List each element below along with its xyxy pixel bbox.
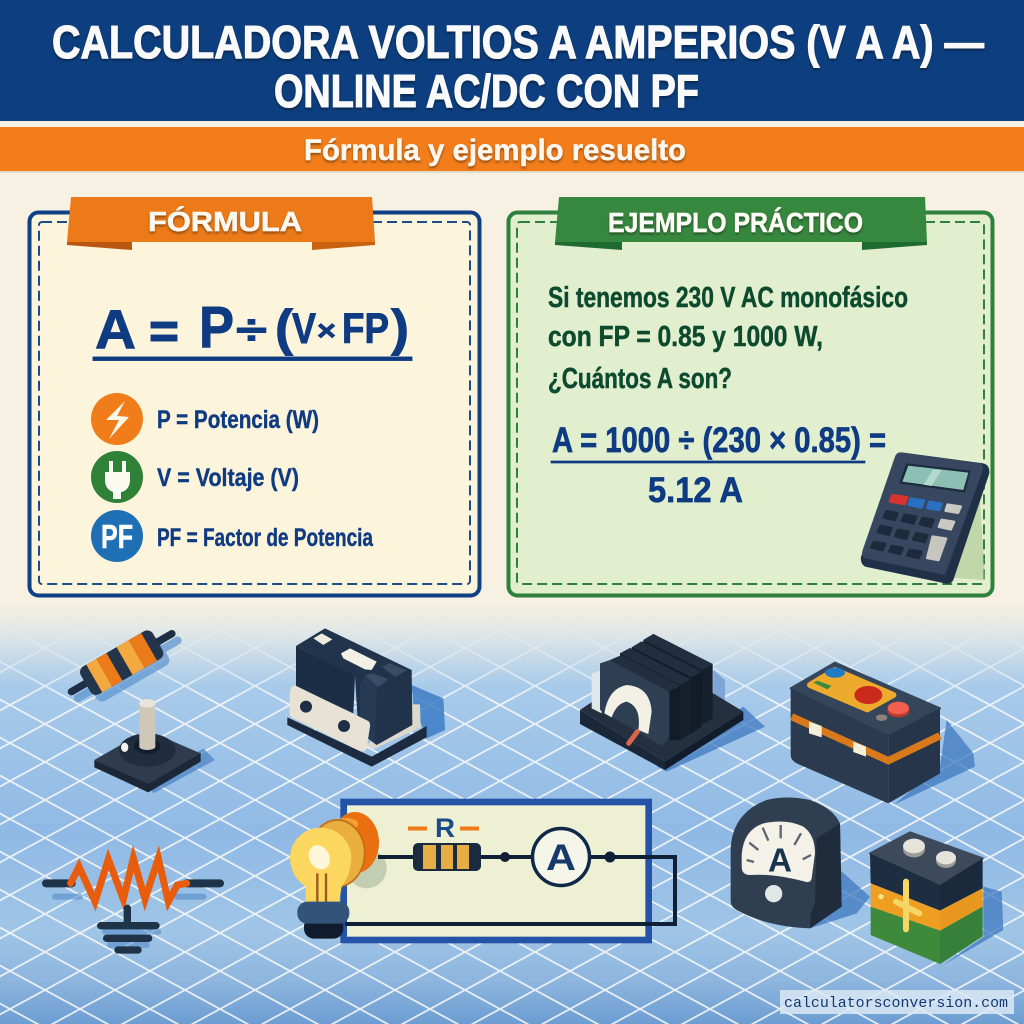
circuit wiring (345, 813, 675, 924)
legend: power (91, 393, 319, 445)
blue isometric floor (0, 600, 1024, 1024)
ribbon: formula: FÓRMULA (148, 206, 302, 237)
circuit resistor (413, 843, 481, 871)
icon: light bulb (290, 812, 387, 939)
subtitle banner: Fórmula y ejemplo resuelto (304, 134, 686, 167)
circuit resistor label: R (435, 813, 455, 843)
ammeter symbol (532, 828, 590, 886)
icon: resistor and ground symbol (46, 858, 220, 950)
icon: small battery (870, 832, 1003, 965)
example calculation: A = 1000 ÷ (230 × 0.85) = (552, 421, 886, 460)
main formula: P (199, 295, 234, 360)
panel: formula (30, 197, 480, 596)
icon: analog ammeter (731, 797, 870, 928)
main formula (93, 295, 412, 360)
icon: heat sink (580, 634, 765, 772)
example question (548, 282, 908, 395)
icon: joystick switch (94, 699, 215, 793)
example question: Si tenemos 230 V AC monofásico (548, 282, 908, 314)
example question: ¿Cuántos A son? (548, 363, 732, 395)
legend: power factor (91, 510, 374, 562)
legend: power factor: PF (101, 518, 133, 555)
icon: relay block (287, 628, 445, 767)
main formula: × (317, 315, 336, 346)
title banner (0, 0, 1024, 121)
title text (52, 16, 984, 117)
main formula: ( (275, 300, 293, 356)
watermark (780, 990, 1014, 1014)
icon: analog ammeter: A (768, 843, 792, 880)
ammeter symbol: A (546, 837, 576, 878)
circuit board (290, 802, 649, 940)
example question: con FP = 0.85 y 1000 W, (548, 321, 823, 353)
left components (46, 618, 649, 950)
main formula: FP (342, 305, 389, 353)
ribbon: formula (67, 197, 375, 250)
legend: voltage: V = Voltaje (V) (157, 464, 299, 492)
legend: power: P = Potencia (W) (157, 406, 319, 434)
circuit resistor label (408, 813, 479, 843)
icon: calculator (861, 452, 989, 584)
example calculation (551, 421, 886, 510)
ribbon: example (555, 197, 927, 250)
main formula: V (292, 305, 316, 353)
main formula: ) (391, 300, 409, 356)
legend: voltage (91, 451, 299, 503)
ribbon: example: EJEMPLO PRÁCTICO (608, 207, 863, 238)
right components (580, 634, 975, 805)
example calculation: 5.12 A (648, 471, 743, 510)
panel: worked example (508, 197, 992, 596)
main formula: A (95, 298, 136, 360)
title text: ONLINE AC/DC CON PF (274, 65, 699, 117)
icon: battery box (791, 663, 975, 805)
subtitle banner (0, 127, 1024, 173)
watermark: calculatorsconversion.com (784, 995, 1008, 1012)
legend: power factor: PF = Factor de Potencia (157, 524, 374, 552)
main formula: ÷ (236, 306, 267, 353)
icon: cylindrical resistor (60, 618, 189, 714)
